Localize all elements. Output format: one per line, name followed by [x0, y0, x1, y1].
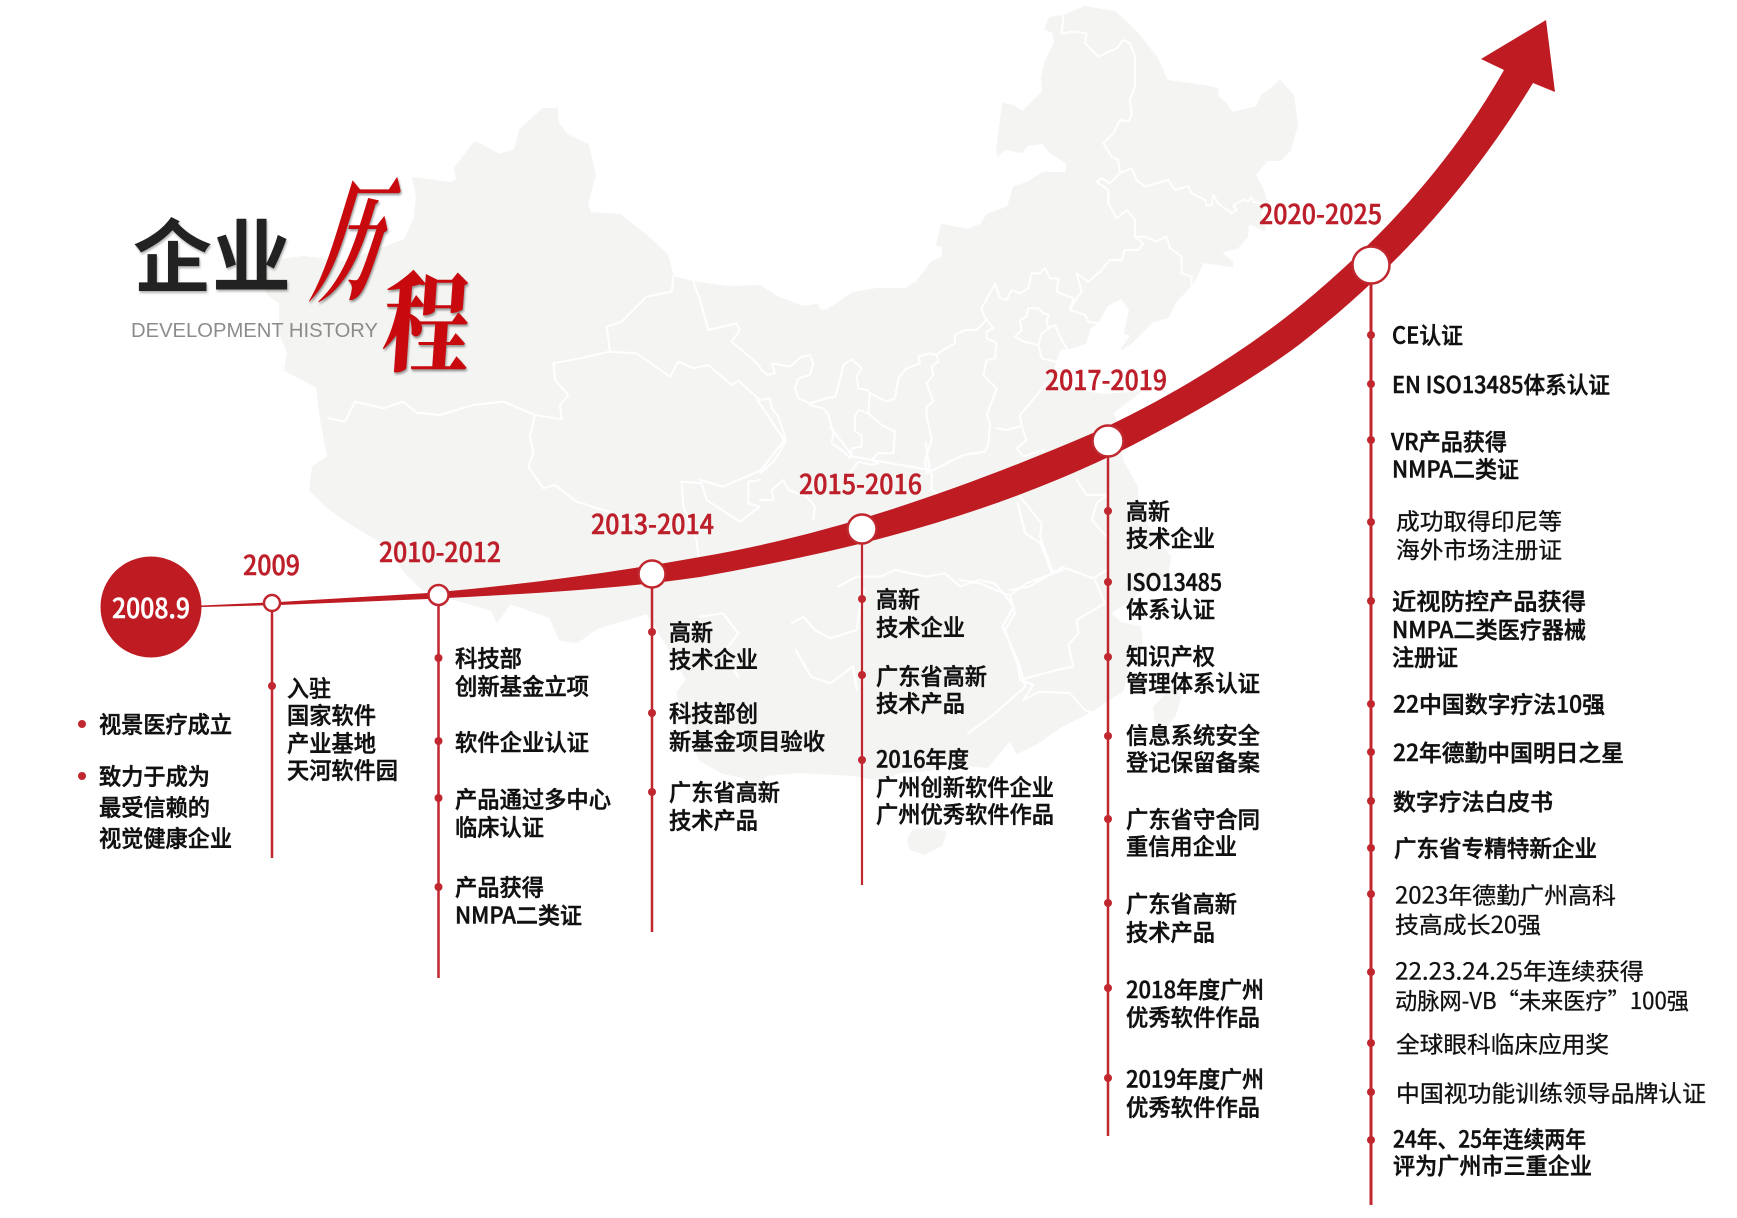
rising arrow ribbon: [201, 20, 1555, 607]
entries: 技高成长20强: [1395, 906, 1541, 940]
entries: 优秀软件作品: [1126, 998, 1260, 1032]
year label: 2015-2016: [799, 463, 922, 502]
entries: 高新: [1126, 492, 1170, 526]
entries: 评为广州市三重企业: [1393, 1147, 1592, 1181]
entries: 创新基金立项: [455, 668, 589, 702]
entries: 广东省专精特新企业: [1394, 830, 1597, 864]
entries: ISO13485: [1126, 564, 1222, 598]
entries: 国家软件: [287, 696, 376, 730]
year label: 2009: [243, 544, 300, 583]
entries: 海外市场注册证: [1396, 531, 1562, 565]
title block: [131, 136, 476, 394]
year label: 2013-2014: [591, 503, 714, 542]
milestone: 2017-2019: [1045, 359, 1264, 1136]
entries: 新基金项目验收: [669, 722, 825, 756]
start circle: [100, 556, 202, 658]
entries: 广东省高新: [876, 658, 987, 692]
heading: 历 calligraphy: 历: [299, 136, 419, 328]
entries: 软件企业认证: [455, 724, 589, 758]
entries: [1367, 316, 1706, 1181]
milestone: 2015-2016: [799, 463, 1054, 885]
entries: 信息系统安全: [1126, 716, 1260, 750]
start date: 2008.9: [112, 587, 190, 626]
entries: 2019年度广州: [1126, 1060, 1264, 1094]
entries: [434, 640, 611, 930]
entries: 中国视功能训练领导品牌认证: [1396, 1074, 1706, 1108]
node: [428, 585, 448, 605]
entries: 技术产品: [669, 802, 758, 836]
entries: 优秀软件作品: [1126, 1088, 1260, 1122]
entries: 2023年德勤广州高科: [1395, 876, 1616, 910]
stem: [271, 610, 273, 858]
entries: 22.23.24.25年连续获得: [1395, 952, 1644, 986]
entries: 科技部创: [669, 694, 758, 728]
entries: 近视防控产品获得: [1392, 582, 1586, 616]
entries: 技术企业: [876, 608, 965, 642]
entries: CE认证: [1392, 316, 1463, 350]
bullet list: 最受信赖的: [99, 788, 210, 822]
node: [1352, 246, 1390, 284]
west province borders: [328, 277, 760, 557]
entries: 2016年度: [876, 740, 969, 774]
entries: 知识产权: [1126, 638, 1215, 672]
bullet list: 致力于成为: [99, 758, 210, 792]
bullet list: 视景医疗成立: [99, 706, 232, 740]
milestone: 2008.9: [78, 556, 232, 854]
entries: 数字疗法白皮书: [1393, 783, 1553, 817]
entries: 体系认证: [1126, 590, 1215, 624]
entries: 注册证: [1392, 638, 1458, 672]
stem: [1107, 450, 1109, 1136]
stem: [861, 540, 863, 885]
bullet list: 视觉健康企业: [99, 820, 232, 854]
entries: [1104, 492, 1264, 1122]
entries: [858, 580, 1054, 830]
entries: 入驻: [287, 670, 331, 704]
stem: [1370, 280, 1372, 1205]
entries: 全球眼科临床应用奖: [1396, 1026, 1609, 1060]
entries: 技术企业: [1126, 520, 1215, 554]
heading: 程 calligraphy: 程: [379, 239, 476, 394]
entries: 2018年度广州: [1126, 971, 1264, 1005]
entries: NMPA二类医疗器械: [1392, 611, 1586, 645]
node: [1092, 426, 1124, 456]
entries: 技术企业: [669, 640, 758, 674]
milestone: 2010-2012: [379, 531, 611, 978]
entries: 24年、25年连续两年: [1393, 1120, 1586, 1154]
entries: 产业基地: [287, 724, 376, 758]
entries: 登记保留备案: [1126, 744, 1260, 778]
entries: NMPA二类证: [1392, 450, 1519, 484]
node: [848, 514, 876, 544]
entries: 产品通过多中心: [455, 780, 611, 814]
entries: 技术产品: [876, 684, 965, 718]
year label: 2020-2025: [1259, 193, 1382, 232]
entries: 科技部: [455, 640, 522, 674]
heading: 企业: 企业: [133, 194, 291, 310]
milestone: 2009: [243, 544, 398, 858]
entries: 成功取得印尼等: [1396, 502, 1562, 536]
year label: 2017-2019: [1045, 359, 1167, 398]
entries: 天河软件园: [287, 752, 398, 786]
entries: 临床认证: [455, 808, 544, 842]
south-east province borders: [960, 480, 1107, 713]
milestone: 2020-2025: [1259, 193, 1706, 1205]
entries: EN ISO13485体系认证: [1392, 366, 1610, 400]
entries: NMPA二类证: [455, 896, 582, 930]
south-west province borders: [700, 400, 1064, 733]
stem: [437, 605, 440, 978]
entries: 广东省高新: [669, 774, 780, 808]
entries: 高新: [669, 614, 713, 648]
entries: 动脉网-VB“未来医疗”100强: [1395, 982, 1689, 1016]
entries: 产品获得: [455, 868, 544, 902]
year label: 2010-2012: [379, 531, 501, 570]
milestone: 2013-2014: [591, 503, 825, 932]
entries: 重信用企业: [1126, 828, 1237, 862]
background map of China: [267, 7, 1297, 855]
entries: 22中国数字疗法10强: [1393, 686, 1605, 720]
entries: 广东省守合同: [1126, 800, 1260, 834]
entries: 广州创新软件企业: [876, 768, 1054, 802]
node: [264, 595, 280, 611]
entries: 技术产品: [1126, 914, 1215, 948]
subtitle: DEVELOPMENT HISTORY: [131, 319, 378, 342]
entries: [648, 614, 825, 836]
stem: [651, 585, 653, 932]
entries: 广东省高新: [1126, 885, 1237, 919]
node: [638, 560, 666, 588]
entries: 22年德勤中国明日之星: [1393, 734, 1624, 768]
bullet list: [78, 706, 232, 854]
entries: 广州优秀软件作品: [876, 796, 1054, 830]
entries: 管理体系认证: [1126, 664, 1260, 698]
entries: [268, 670, 398, 786]
entries: VR产品获得: [1390, 423, 1507, 457]
entries: 高新: [876, 580, 920, 614]
northern and central province borders: [760, 16, 1267, 520]
